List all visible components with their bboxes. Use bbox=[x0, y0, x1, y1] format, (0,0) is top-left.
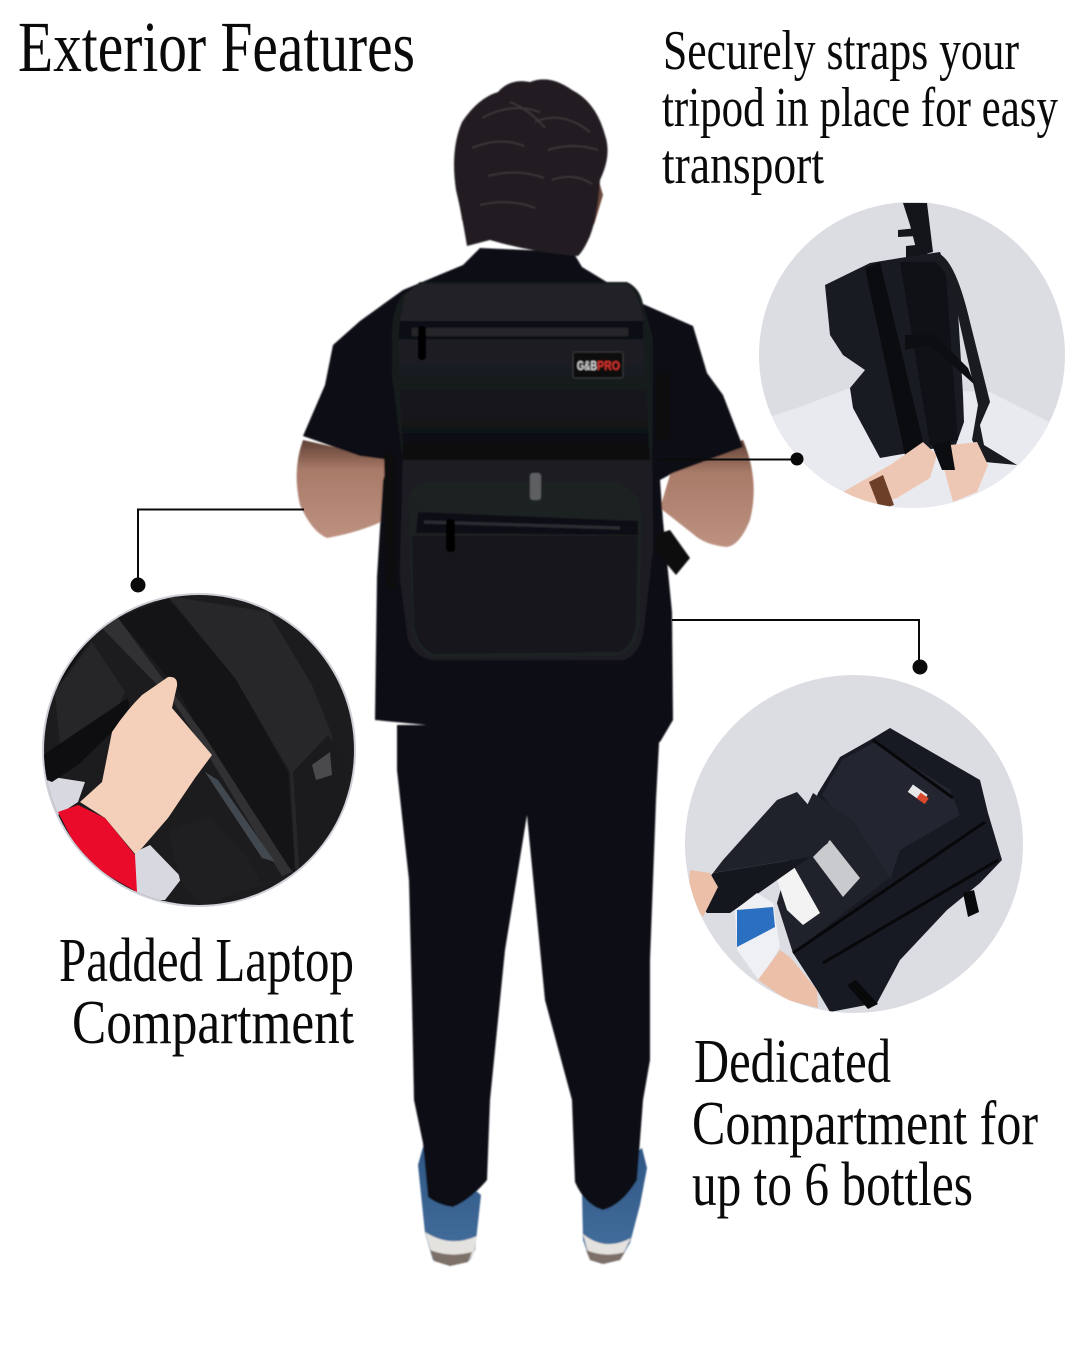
figure: person seen from behind wearing backpack bbox=[297, 79, 754, 1266]
rod bbox=[102, 618, 292, 876]
backpack bbox=[384, 282, 690, 660]
text block: laptop compartment caption: Padded Laptop bbox=[59, 927, 354, 995]
panel: bottle compartment photo bbox=[680, 670, 1030, 1020]
red sleeve bbox=[58, 805, 137, 892]
text block: bottle compartment caption: Dedicated bbox=[694, 1028, 891, 1096]
shoes bbox=[418, 1147, 647, 1266]
buckles bbox=[847, 980, 878, 1009]
buckle bbox=[312, 752, 332, 780]
spray bottle bbox=[775, 865, 820, 925]
ears bbox=[456, 178, 603, 230]
hands bbox=[758, 950, 818, 1008]
backpack logo patch: G&B bbox=[577, 358, 597, 373]
shoulder strap bbox=[935, 253, 1017, 465]
text block: tripod strap caption: transport bbox=[662, 134, 824, 196]
zip band bbox=[398, 321, 643, 339]
top flap bbox=[400, 284, 643, 321]
panel: tripod strap photo bbox=[750, 195, 1070, 515]
left strap loop bbox=[42, 698, 130, 782]
bag bbox=[777, 728, 1002, 1012]
padded band bbox=[168, 596, 340, 880]
title: Exterior Features bbox=[18, 7, 415, 87]
zipper pulls bbox=[418, 326, 541, 552]
leader line: bottle compartment bbox=[672, 620, 928, 674]
mesh panel bbox=[118, 598, 295, 872]
lower section bbox=[400, 460, 653, 660]
seams bbox=[793, 740, 998, 963]
trousers bbox=[397, 725, 660, 1210]
tripod bbox=[898, 203, 933, 258]
grey background wedges bbox=[46, 776, 85, 815]
hand bbox=[80, 677, 212, 854]
text block: laptop compartment caption bbox=[59, 927, 354, 1057]
backpack logo patch bbox=[573, 352, 623, 378]
bag body bbox=[825, 252, 964, 470]
interior bbox=[777, 793, 890, 953]
shirt bbox=[303, 248, 743, 742]
bottle bbox=[813, 840, 860, 897]
hair bbox=[454, 79, 608, 256]
leader line: tripod bbox=[658, 452, 804, 466]
left fabric bbox=[55, 642, 125, 745]
blue label bottle bbox=[735, 893, 780, 982]
gap lining bbox=[205, 772, 275, 862]
hands bbox=[843, 442, 937, 508]
panel: padded laptop compartment photo bbox=[40, 590, 360, 910]
side buckles bbox=[655, 373, 690, 575]
left side strap shadow bbox=[384, 452, 396, 590]
leader line: laptop compartment bbox=[130, 510, 304, 592]
lower pocket bbox=[178, 874, 201, 905]
logo bbox=[908, 785, 928, 802]
text block: bottle compartment caption bbox=[692, 1028, 1038, 1219]
upper pocket bbox=[398, 340, 650, 460]
text block: laptop compartment caption: Compartment bbox=[72, 989, 354, 1057]
text block: bottle compartment caption: up to 6 bottles bbox=[692, 1151, 973, 1219]
flap bbox=[713, 792, 830, 873]
text block: tripod strap caption bbox=[662, 20, 1058, 196]
arms bbox=[297, 440, 754, 547]
backpack logo patch: PRO bbox=[597, 358, 620, 373]
